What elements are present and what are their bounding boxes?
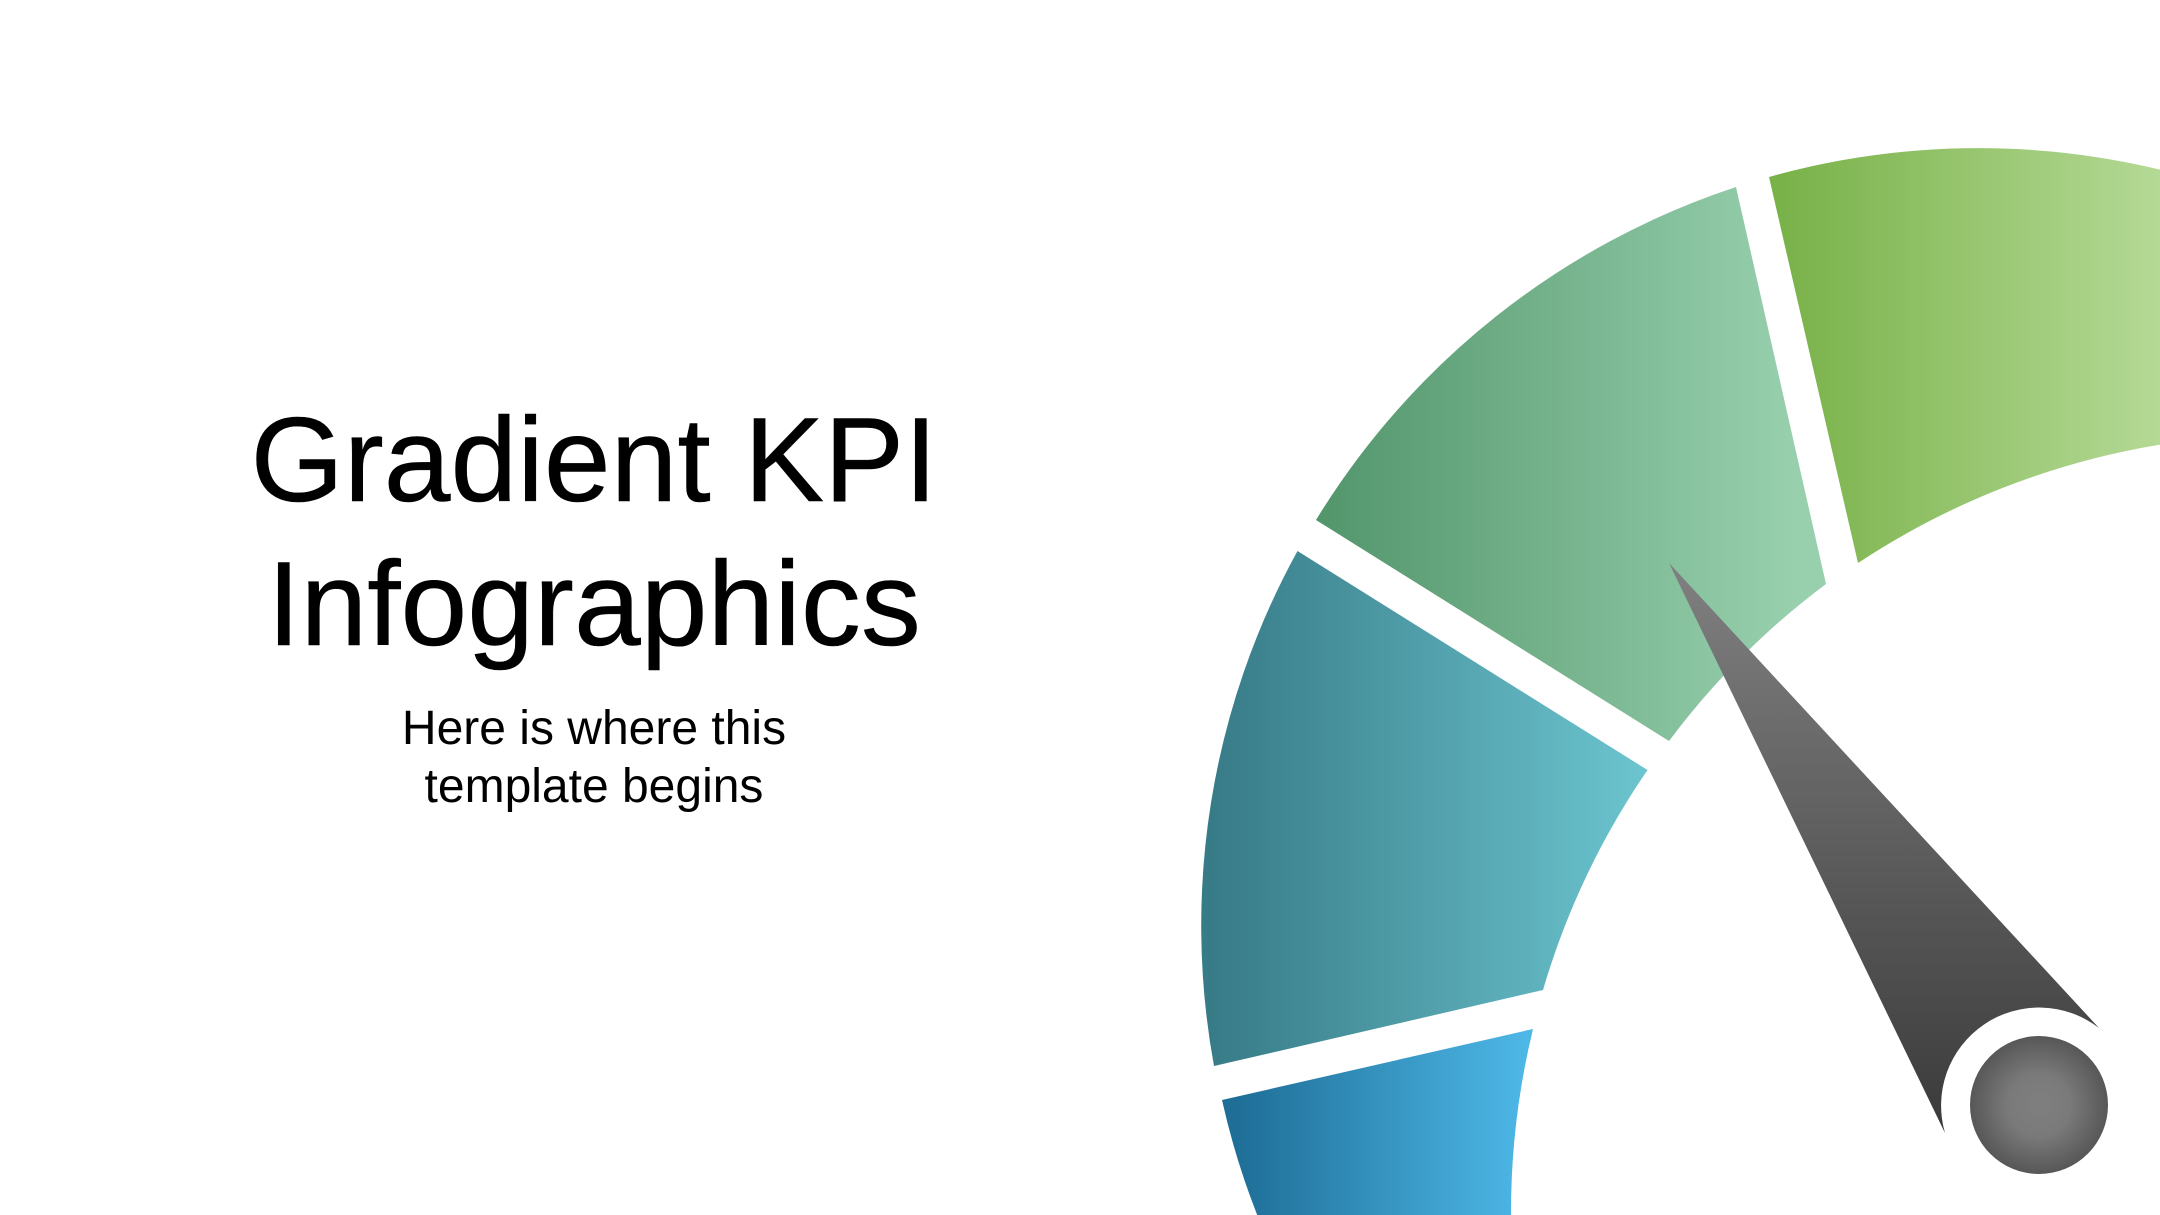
title: Infographics — [267, 537, 921, 671]
gauge segment: light green — [1769, 148, 2160, 563]
gauge needle — [1669, 563, 2099, 1133]
subtitle: Here is where this — [402, 702, 786, 755]
gauge segment: mint green — [1316, 187, 1826, 741]
subtitle: template begins — [425, 760, 763, 813]
gauge needle hub — [1970, 1036, 2108, 1174]
title — [250, 393, 938, 671]
gauge segment: blue — [1222, 1029, 1533, 1215]
gauge segment: teal — [1201, 551, 1648, 1066]
title: Gradient KPI — [250, 393, 938, 527]
subtitle — [402, 702, 786, 813]
